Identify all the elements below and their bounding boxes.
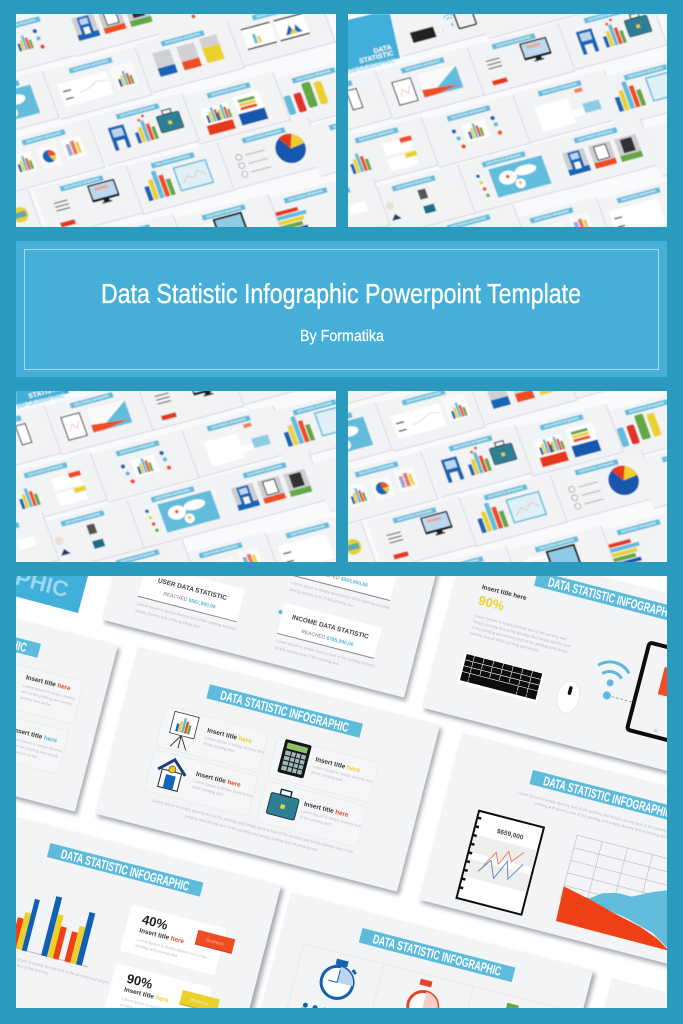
slide: left partial with insert titles: Insert title here — [25, 674, 72, 693]
icon: blue stopwatch — [318, 956, 359, 1002]
slide: left partial with insert titles: Lorem Ipsum is simply dummy — [22, 683, 76, 701]
cell: briefcase: Lorem Ipsum is simply dummy text — [301, 808, 362, 829]
cell: calculator: Lorem Ipsum is simply dummy text — [312, 764, 374, 784]
banner title: Data Statistic Infographic Powerpoint Template — [101, 278, 581, 309]
slide: user and income statistics: Lorem Ipsum is simply dummy text of the printing industry — [276, 638, 376, 668]
icon: wifi — [590, 659, 641, 706]
slide: notebook and area chart — [418, 733, 683, 981]
panel: large slide collage — [0, 453, 683, 1024]
cover slide: blue corner — [347, 14, 400, 76]
card: 40 percent: printing and printing and — [135, 943, 178, 958]
slide: four icons — [365, 164, 476, 238]
card: 40 percent: 40% — [141, 912, 170, 933]
bar chart — [0, 886, 103, 967]
cell: presentation board: of the printing and — [202, 740, 235, 753]
slide: scatter table — [511, 69, 622, 143]
card: 40 percent — [120, 904, 237, 978]
cover slide: blue corner: DATA — [373, 44, 392, 55]
slide: two charts — [225, 0, 336, 67]
percent text — [477, 584, 528, 619]
paragraph: printing and dummy text of the printing and simply dummy text of printing and — [534, 800, 667, 839]
cell: house — [144, 749, 259, 817]
slide: bars and dots — [0, 5, 81, 79]
paragraph: Lorem Ipsum is simply dummy text of the printing and simply dummy text of the printing and simply — [517, 790, 683, 838]
footer text: printing and dummy text of the printing and simply dummy text of printing and — [184, 813, 318, 852]
card: 40 percent: Insert title here — [139, 927, 185, 946]
slide: monitor — [465, 22, 576, 96]
slide: user and income statistics: REACHED $567,900,00 — [163, 591, 216, 611]
percent text: Insert title here — [481, 584, 528, 602]
title bar — [206, 684, 363, 738]
cell: presentation board — [156, 706, 270, 773]
slide: user and income statistics: simply dummy text of the printing and — [289, 587, 354, 608]
slide: line card and bars — [42, 46, 153, 120]
slide: user and income statistics: REACHED $785,900,00 — [301, 629, 354, 648]
slide: left partial with insert titles: Lorem Ipsum is simply dummy — [9, 735, 62, 753]
slide: pedestal charts — [180, 71, 291, 145]
slide: left partial with insert titles: dummy text of the — [6, 747, 39, 760]
slide: four icon cells — [94, 647, 443, 895]
paragraph: Lorem Ipsum is simply dummy text of the printing and — [474, 613, 567, 641]
slide: bottom partial — [420, 203, 531, 277]
slide: user and income statistics: Lorem Ipsum is simply dummy text of the printing industry — [291, 580, 391, 610]
cell: house: Lorem Ipsum is simply dummy text — [193, 778, 254, 799]
slide: bottom partial — [80, 213, 191, 287]
card: 90 percent: 90% — [125, 971, 155, 992]
cover corner — [10, 565, 88, 613]
slide: left partial — [280, 176, 391, 250]
cell: calculator: Insert title here — [315, 756, 361, 774]
icon: people row — [300, 1002, 338, 1022]
area chart — [555, 862, 683, 965]
icon: mouse — [554, 679, 583, 715]
slide: pie chart — [215, 116, 326, 190]
table grid — [561, 835, 683, 939]
cell: briefcase: Insert title here — [303, 801, 350, 819]
slide: colored tables — [134, 19, 245, 93]
slide: bottom partial monitor — [175, 193, 286, 267]
slide: device icons with labels — [547, 116, 658, 190]
cell: house: of the printing and — [191, 784, 223, 797]
slide: three cards — [503, 196, 614, 270]
panel: slide collage middle right — [268, 298, 683, 619]
card: 90 percent: Lorem Ipsum is simply dummy — [121, 996, 175, 1014]
slide: left partial with insert titles: dummy text of the — [19, 694, 52, 707]
cell: briefcase: of the printing and — [299, 814, 331, 827]
slide: left partial with insert titles: text of the printing and simply — [21, 688, 73, 706]
slide: user and income statistics: simply dummy text of the printing and — [274, 645, 339, 666]
slide: notebook and area chart — [374, 46, 485, 120]
slide: tablet list — [282, 69, 393, 143]
banner subtitle: By Formatika — [300, 328, 384, 345]
cell: calculator: of the printing and — [311, 769, 343, 782]
icon: keyboard — [457, 653, 544, 703]
title bar: DATA STATISTIC INFOGRAPHIC — [59, 846, 191, 894]
slide: bottom right partial — [604, 978, 680, 1008]
card: 90 percent: Insert title here — [123, 986, 170, 1005]
title bar — [359, 928, 515, 982]
slide: top partial — [486, 14, 581, 39]
slide: stacked cylinders — [265, 56, 376, 130]
slide: building, chart, briefcase — [89, 92, 200, 166]
title bar — [47, 843, 203, 897]
slide: bars with percent cards — [0, 808, 284, 1020]
cell: presentation board: Lorem Ipsum is simply dummy text — [204, 735, 266, 755]
slide: horizontal stacked bars — [257, 176, 368, 250]
chart caption: dummy text of the printing — [3, 959, 49, 975]
slide: right partial — [302, 103, 413, 177]
cell grid — [287, 944, 560, 1008]
banner inner border — [24, 250, 658, 370]
card: 90 percent: printing and printing — [120, 1002, 155, 1015]
icon: tablet — [627, 642, 683, 744]
paragraph — [470, 613, 573, 661]
slide: bars with percent cards — [328, 116, 439, 190]
icon: red stopwatch — [408, 979, 438, 1024]
cell: briefcase — [256, 780, 367, 847]
card: 90 percent: Business — [190, 997, 210, 1007]
slide: world map — [0, 69, 60, 143]
slide: user and income statistics: USER DATA STATISTIC — [157, 577, 228, 602]
chart caption: Lorem Ipsum is simply dummy text of the printing and simply — [4, 953, 109, 985]
panel: slide collage top left — [16, 14, 336, 227]
slide: bars and line frame — [124, 141, 235, 215]
card: 40 percent: Business — [206, 937, 225, 947]
slide: radial list chart — [420, 94, 531, 168]
slide: bars and frame — [597, 53, 683, 127]
slide: user and income statistics: simply dummy text of the printing and — [135, 608, 200, 629]
icon: notebook — [457, 811, 544, 915]
title bar: DATA STATISTIC INFOGRAPHIC — [371, 931, 503, 979]
icon: green stopwatch — [506, 1003, 519, 1012]
panel: slide collage top right — [348, 14, 667, 227]
slide: user and income statistics — [101, 453, 450, 701]
slide: top partial — [158, 14, 196, 35]
icon: notebook: $659,000 — [496, 828, 524, 842]
paragraph: dummy text of of the printing and simply — [470, 630, 539, 653]
cell: house: Insert title here — [195, 771, 242, 789]
slide: device icons with labels — [65, 14, 158, 57]
slide: keyboard and tablet — [383, 0, 494, 57]
slide: user and income statistics: REACHED $563,900,00 — [315, 570, 369, 589]
slide: monitor — [33, 164, 144, 238]
panel: slide collage middle left — [0, 300, 423, 612]
card: 40 percent: Lorem Ipsum is simply dummy text of the — [137, 937, 209, 960]
cover corner: PHIC — [13, 565, 71, 602]
slide: building, chart, briefcase — [557, 0, 668, 70]
paragraph: simply dummy text of the printing and simply dummy text — [473, 619, 572, 649]
slide: user and income statistics: INCOME DATA STATISTIC — [291, 614, 370, 641]
slide: world map with legend — [455, 140, 566, 214]
title bar: DATA STATISTIC INFOGRAPHIC — [219, 687, 351, 735]
banner panel — [16, 241, 667, 377]
cover slide: blue corner: STATISTIC — [359, 50, 394, 65]
slide: left partial with insert titles: text of the printing and simply — [7, 741, 59, 759]
footer text: Lorem Ipsum is simply dummy text of the printing and simply dummy text of the printing and simply dummy text of the — [152, 798, 355, 855]
paragraph: of the printing and dummy text of the printing and simply — [471, 624, 569, 654]
slide: left partial with insert titles — [0, 567, 121, 815]
slide: line card — [590, 176, 683, 250]
slide: user and income statistics: Lorem Ipsum is simply dummy text of the printing industry — [136, 601, 237, 631]
slide: left partial with insert titles: Insert title here — [12, 726, 58, 745]
slide: keyboard wifi tablet — [421, 541, 683, 789]
slide: yellow circle — [0, 188, 46, 262]
cover slide: blue corner: INFOGRAPHIC — [347, 57, 396, 76]
slide: right small — [643, 103, 683, 177]
cell: calculator — [268, 737, 379, 803]
percent text: 90% — [477, 593, 506, 614]
slide: stopwatches — [261, 893, 596, 1024]
slide: three cards — [0, 118, 106, 192]
cell: presentation board: Insert title here — [206, 727, 253, 745]
card: 90 percent — [105, 963, 220, 1020]
